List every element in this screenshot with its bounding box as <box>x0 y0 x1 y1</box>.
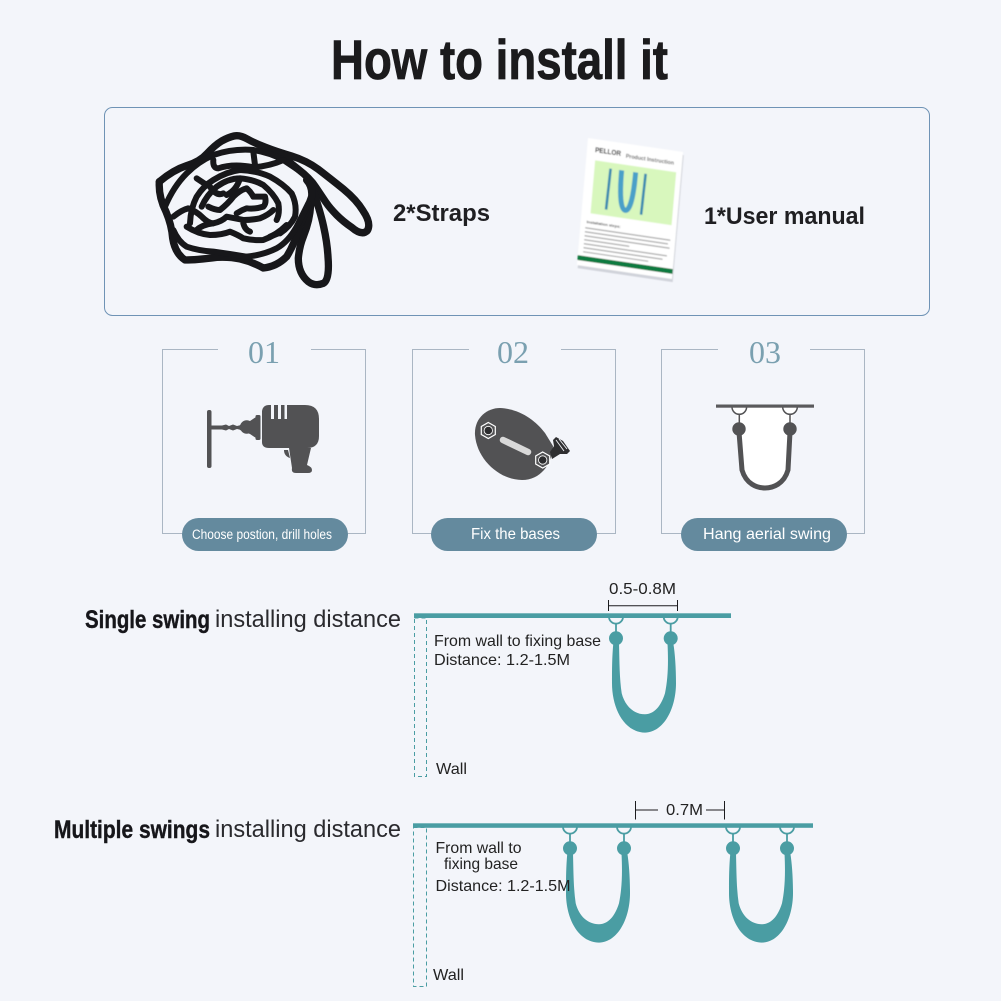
button: step 01 label <box>182 518 348 551</box>
swing: second <box>726 827 794 943</box>
heading: multiple swings <box>54 816 401 844</box>
button: step 01 label: Choose postion, drill holes <box>192 527 332 542</box>
image: user manual: PELLOR <box>595 147 621 158</box>
heading: multiple swings: installing distance <box>215 816 401 843</box>
heading: single swing <box>85 606 401 634</box>
label: straps: 2*Straps <box>393 200 490 227</box>
panel: step 02 <box>412 334 616 551</box>
heading: multiple swings: Multiple swings <box>54 816 210 844</box>
image: user manual <box>577 138 684 282</box>
heading: single swing: installing distance <box>215 606 401 633</box>
icon: hanging swing <box>716 404 814 488</box>
label: wall: Wall <box>433 967 464 984</box>
panel: step 01 <box>162 334 366 551</box>
panel: package contents <box>104 108 930 316</box>
title: How to install it <box>331 28 668 91</box>
icon: fixing base <box>475 408 570 480</box>
step number: 02 <box>497 334 529 370</box>
diagram: multiple swings <box>413 801 813 986</box>
image: user manual: Installation steps: <box>587 219 621 229</box>
dimension: swing gap: 0.7M <box>666 802 703 819</box>
swing <box>609 617 678 733</box>
button: step 03 label: Hang aerial swing <box>703 526 831 543</box>
step number: 03 <box>749 334 781 370</box>
wall <box>414 618 426 776</box>
image: black straps <box>159 136 369 285</box>
image: user manual: Product Instruction <box>626 154 675 167</box>
dimension: swing spacing <box>608 581 678 611</box>
ceiling bar <box>414 613 731 618</box>
button: step 02 label <box>431 518 597 551</box>
note: wall distance: From wall to fixing base <box>434 633 601 650</box>
button: step 03 label <box>681 518 847 551</box>
note: wall distance: Distance: 1.2-1.5M <box>434 652 570 669</box>
label: user manual: 1*User manual <box>704 203 865 230</box>
note: wall distance: From wall to <box>436 840 522 857</box>
note: wall distance: fixing base <box>444 856 518 873</box>
dimension: swing spacing: 0.5-0.8M <box>609 581 676 598</box>
button: step 02 label: Fix the bases <box>471 526 560 543</box>
ceiling bar <box>413 823 813 828</box>
step number: 01 <box>248 334 280 370</box>
swing: first <box>563 827 631 943</box>
diagram: single swing <box>414 581 731 778</box>
note: wall distance <box>436 840 570 895</box>
panel: step 03 <box>662 334 864 551</box>
dimension: swing gap <box>636 801 724 820</box>
note: wall distance: Distance: 1.2-1.5M <box>436 878 570 895</box>
wall <box>414 828 426 986</box>
icon: drill <box>207 405 319 473</box>
note: wall distance <box>434 633 601 669</box>
label: wall: Wall <box>436 761 467 778</box>
heading: single swing: Single swing <box>85 606 210 634</box>
